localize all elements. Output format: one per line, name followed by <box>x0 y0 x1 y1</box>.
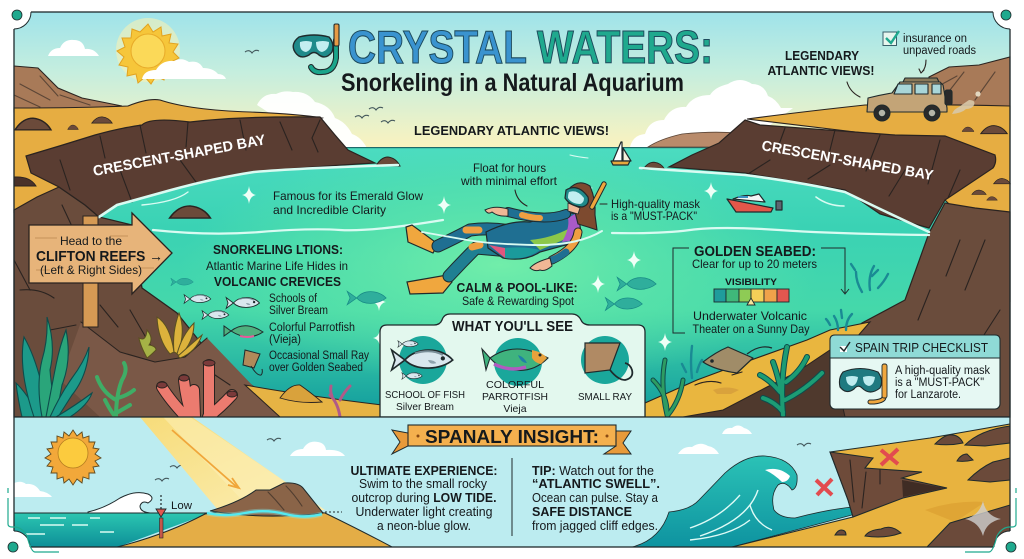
teal plants in water <box>682 264 888 378</box>
text: must-pack <box>600 197 701 223</box>
tide gauge: Low <box>171 500 192 512</box>
subtitle: Snorkeling in a Natural Aquarium <box>341 69 684 97</box>
title <box>293 21 713 97</box>
fish list: (Vieja) <box>269 334 301 346</box>
arm front <box>552 232 578 260</box>
text: famous: and Incredible Clarity <box>273 203 386 217</box>
text: tip <box>532 464 660 533</box>
callout: insurance: insurance on <box>903 33 967 45</box>
text: snorkeling lotions: VOLCANIC CREVICES <box>214 274 341 289</box>
wave right <box>632 456 852 547</box>
plant seaweed right <box>653 347 822 415</box>
sign: clifton reefs: (Left & Right Sides) <box>40 263 142 277</box>
panel: checklist: for Lanzarote. <box>895 389 961 401</box>
boat <box>727 194 782 212</box>
item: school of fish: SCHOOL OF FISH <box>385 389 465 401</box>
fish list: over Golden Seabed <box>269 362 363 374</box>
item: parrotfish: Vieja <box>503 403 527 415</box>
panel: golden seabed: Clear for up to 20 meters <box>692 257 817 271</box>
text: crescent bay right: CRESCENT-SHAPED BAY <box>760 138 935 184</box>
item: small ray <box>578 336 632 403</box>
icon: jeep <box>867 78 981 121</box>
panel: checklist <box>830 335 1000 409</box>
gauge <box>714 289 789 305</box>
fish list: Silver Bream <box>269 305 328 317</box>
panel: golden seabed: Theater on a Sunny Day <box>692 322 810 336</box>
sky <box>14 12 1010 148</box>
text: tip: “ATLANTIC SWELL”. <box>532 477 660 491</box>
waterline over swimmer <box>422 231 602 245</box>
text: calm: Safe & Rewarding Spot <box>462 294 575 308</box>
item: parrotfish: COLORFUL <box>486 379 544 391</box>
panel: bottom strip <box>14 417 1010 547</box>
text: ultimate experience: Underwater light creating <box>356 505 493 519</box>
icon: ray small <box>243 350 262 375</box>
panel: golden seabed: VISIBILITY <box>725 277 777 287</box>
text: tip: from jagged cliff edges. <box>532 519 658 533</box>
text: crescent bay left: CRESCENT-SHAPED BAY <box>92 132 267 180</box>
text: ultimate experience: Swim to the small rocky <box>359 477 488 491</box>
text: famous: Famous for its Emerald Glow <box>273 189 423 203</box>
fish list: Colorful Parrotfish <box>269 322 355 334</box>
panel: golden seabed <box>673 244 849 336</box>
plant yellow <box>139 313 202 358</box>
callout: legendary views right <box>768 48 874 97</box>
item: school of fish <box>385 336 465 413</box>
panel: golden seabed: GOLDEN SEABED: <box>694 244 816 260</box>
far headland <box>648 132 737 147</box>
callout: insurance: unpaved roads <box>903 45 976 57</box>
text: ultimate experience: a neon-blue glow. <box>377 519 471 533</box>
text: snorkeling lotions: Atlantic Marine Life Hides in <box>206 259 348 273</box>
right cliff <box>643 57 1010 417</box>
cliff right <box>830 452 947 517</box>
text: float for hours <box>460 161 558 206</box>
text: snorkeling lotions <box>206 242 348 289</box>
stingray <box>703 347 772 373</box>
item: school of fish: Silver Bream <box>396 401 454 413</box>
item: parrotfish: PARROTFISH <box>482 391 548 403</box>
text: snorkeling lotions: SNORKELING LTIONS: <box>213 242 343 257</box>
rocky outcrop <box>210 483 323 516</box>
text: must-pack: is a "MUST-PACK" <box>611 209 697 223</box>
icon: mask and snorkel <box>293 24 339 72</box>
text: famous <box>273 189 423 217</box>
panel: checklist: is a "MUST-PACK" <box>895 377 984 389</box>
text: tip: TIP: Watch out for the <box>532 464 654 478</box>
callout: legendary views right: LEGENDARY <box>785 48 859 63</box>
sea left <box>14 513 210 547</box>
heading: legendary views: LEGENDARY ATLANTIC VIEWS! <box>414 123 609 138</box>
text: ultimate experience: ULTIMATE EXPERIENCE: <box>350 463 498 478</box>
sign: clifton reefs: CLIFTON REEFS → <box>36 248 163 265</box>
arrow <box>841 289 849 294</box>
text: calm <box>456 280 578 308</box>
tide gauge <box>156 495 192 538</box>
plant seaweed left <box>16 317 92 417</box>
sign: clifton reefs: Head to the <box>60 234 122 248</box>
corner bottom right <box>965 488 1024 559</box>
clouds <box>14 426 752 497</box>
seabed sand right <box>645 322 870 417</box>
title main: CRYSTAL WATERS: <box>348 21 713 73</box>
fish list <box>184 293 369 375</box>
corner top left <box>0 0 31 29</box>
text: ultimate experience: outcrop during LOW TIDE. <box>352 491 496 505</box>
sailboat <box>611 142 631 165</box>
birds <box>245 50 395 123</box>
heading: WHAT YOU'LL SEE <box>452 319 573 335</box>
header <box>830 335 1000 358</box>
board <box>29 213 172 294</box>
neon glow <box>207 511 322 516</box>
corner bottom left <box>0 488 59 559</box>
sparkle watermark <box>965 501 1001 536</box>
post <box>83 216 98 327</box>
icon: silver bream <box>184 295 260 319</box>
panel: checklist: SPAIN TRIP CHECKLIST <box>855 341 988 355</box>
icon: sun <box>116 18 180 84</box>
text: calm: CALM & POOL-LIKE: <box>456 280 578 295</box>
icon: sun small <box>45 430 101 485</box>
loose teal fish <box>171 277 656 310</box>
text: tip: Ocean can pulse. Stay a <box>532 491 658 505</box>
coral pink <box>162 365 232 417</box>
light beam <box>140 417 325 510</box>
legs <box>438 229 530 276</box>
head and hair <box>568 183 597 230</box>
fin upper <box>406 225 438 253</box>
fish list: Occasional Small Ray <box>269 350 369 362</box>
text: ultimate experience <box>350 463 498 533</box>
birds <box>155 438 811 481</box>
icon: checkbox <box>883 31 899 46</box>
callout: insurance <box>883 31 976 73</box>
sand right <box>732 424 1010 547</box>
text: must-pack: High-quality mask <box>611 197 701 211</box>
text: float for hours: with minimal effort <box>460 174 558 188</box>
left cliff <box>14 66 400 417</box>
foam lines <box>99 155 929 235</box>
text: float for hours: Float for hours <box>473 161 546 175</box>
banner: SPANALY INSIGHT: <box>425 427 599 447</box>
wave left <box>88 493 152 513</box>
arm back <box>508 212 566 218</box>
icon: parrotfish <box>224 326 263 337</box>
coral openings <box>157 360 237 397</box>
panel: checklist: A high-quality mask <box>895 365 990 377</box>
rocks right <box>835 426 1010 547</box>
banner <box>392 425 631 454</box>
callout: legendary views right: ATLANTIC VIEWS! <box>768 63 874 78</box>
corner top right <box>993 0 1024 29</box>
plant small green <box>97 363 134 417</box>
panel: what you'll see <box>380 314 645 417</box>
sign: clifton reefs <box>29 213 172 327</box>
text: tip: SAFE DISTANCE <box>532 505 632 519</box>
red x marks <box>816 449 898 495</box>
torso <box>486 212 581 259</box>
panel: golden seabed: Underwater Volcanic <box>693 309 807 323</box>
fin lower <box>407 275 452 294</box>
coral purple <box>330 386 350 417</box>
item: parrotfish <box>482 338 548 415</box>
fish list: Schools of <box>269 293 318 305</box>
sand bank <box>117 509 392 547</box>
icon: mask <box>839 364 887 402</box>
seabed sand left <box>245 385 382 417</box>
sparkles <box>242 182 718 351</box>
swimmer <box>406 183 604 294</box>
water <box>14 147 1010 418</box>
panel: upper scene <box>14 12 1010 418</box>
item: small ray: SMALL RAY <box>578 391 632 403</box>
clouds <box>48 40 793 148</box>
